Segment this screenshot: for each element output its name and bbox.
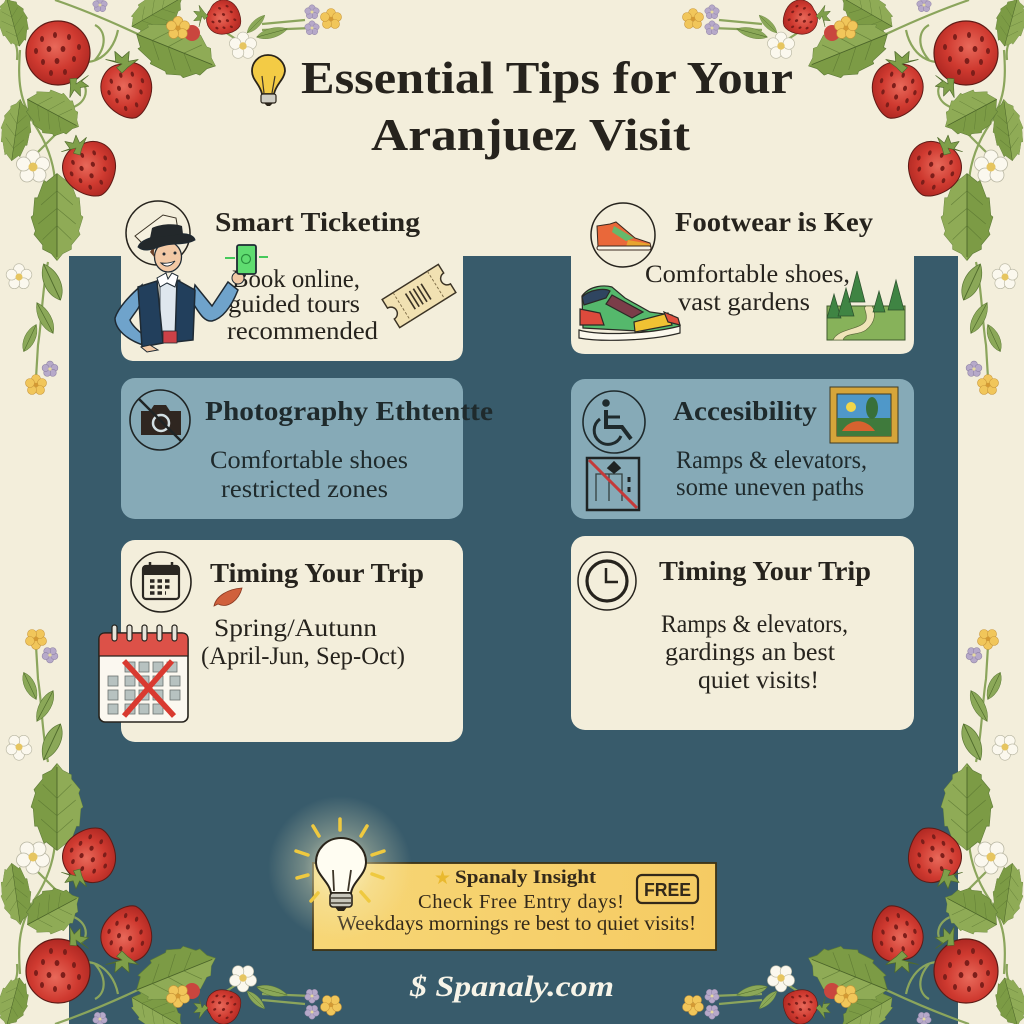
glow around insight bulb — [268, 796, 412, 940]
text: timing right body: gardings an best — [665, 639, 835, 666]
text: accessibility body: some uneven paths — [676, 474, 864, 501]
text: footwear body: vast gardens — [678, 289, 810, 316]
icon: character in traditional dress with phone — [115, 201, 268, 352]
text: smart ticketing body: recommended — [227, 318, 379, 345]
text: accessibility body: Ramps & elevators, — [676, 447, 867, 474]
text: footwear body — [645, 261, 850, 316]
text: photography body — [210, 447, 408, 503]
decoration: bottom-left strawberry corner — [0, 630, 342, 1024]
heading: footwear: Footwear is Key — [675, 207, 874, 237]
heading: smart ticketing: Smart Ticketing — [215, 207, 421, 237]
title: Essential Tips for Your — [301, 52, 793, 103]
card: timing right — [571, 536, 914, 730]
icon: large calendar crossed out — [99, 625, 188, 722]
icon: wheelchair — [583, 391, 645, 453]
text: timing right body: quiet visits! — [698, 667, 819, 694]
teal panel — [69, 256, 958, 1024]
icon: calendar in circle — [131, 552, 191, 612]
text: timing left body — [201, 615, 405, 670]
watermark: spanaly.com: $ Spanaly.com — [409, 970, 614, 1003]
icon: elevator crossed out — [587, 458, 639, 510]
badge: free: FREE — [644, 880, 691, 900]
icon: small shoe in circle — [591, 203, 655, 267]
text: timing left body: (April-Jun, Sep-Oct) — [201, 643, 405, 670]
text: photography body: Comfortable shoes — [210, 447, 408, 474]
callout line one: Check Free Entry days! — [418, 891, 624, 913]
text: smart ticketing body: guided tours — [228, 291, 360, 318]
icon: title light bulb — [252, 55, 285, 106]
title — [301, 52, 793, 160]
heading: accessibility: Accesibility — [673, 396, 818, 426]
text: accessibility body — [676, 447, 867, 501]
icon: ticket — [382, 264, 456, 328]
callout heading: Spanaly Insight — [455, 867, 597, 888]
decoration: bottom-right strawberry corner — [682, 630, 1024, 1024]
heading: timing left: Timing Your Trip — [210, 558, 424, 588]
icon: glowing light bulb — [296, 819, 384, 911]
title: Aranjuez Visit — [371, 109, 691, 160]
card: accessibility — [571, 379, 914, 519]
text: photography body: restricted zones — [221, 476, 388, 503]
icon: garden landscape — [827, 271, 905, 340]
card: timing left — [99, 540, 463, 742]
text: timing right body: Ramps & elevators, — [661, 611, 848, 638]
text: smart ticketing body — [227, 266, 379, 345]
heading: photography: Photography Ethtentte — [205, 396, 493, 426]
icon: no camera — [130, 390, 190, 450]
icon: clock — [578, 552, 636, 610]
card: photography — [121, 378, 493, 519]
text: timing left body: Spring/Autunn — [214, 615, 378, 642]
text: timing right body — [661, 611, 848, 694]
badge: free — [637, 875, 698, 903]
card: footwear — [571, 203, 914, 354]
callout line two: Weekdays mornings re best to quiet visits! — [337, 911, 696, 935]
decoration: top-left strawberry corner — [0, 0, 342, 395]
decoration: top-right strawberry corner — [682, 0, 1024, 395]
icon: painting — [830, 387, 898, 443]
text: smart ticketing body: Book online, — [232, 266, 360, 293]
card: smart ticketing — [115, 201, 463, 361]
icon: colourful sneaker — [579, 286, 680, 340]
icon: star: ★ — [434, 867, 451, 889]
icon: autumn leaf — [214, 588, 242, 606]
callout: spanaly insight — [313, 863, 716, 950]
text: footwear body: Comfortable shoes, — [645, 261, 850, 288]
heading: timing right: Timing Your Trip — [659, 556, 871, 586]
